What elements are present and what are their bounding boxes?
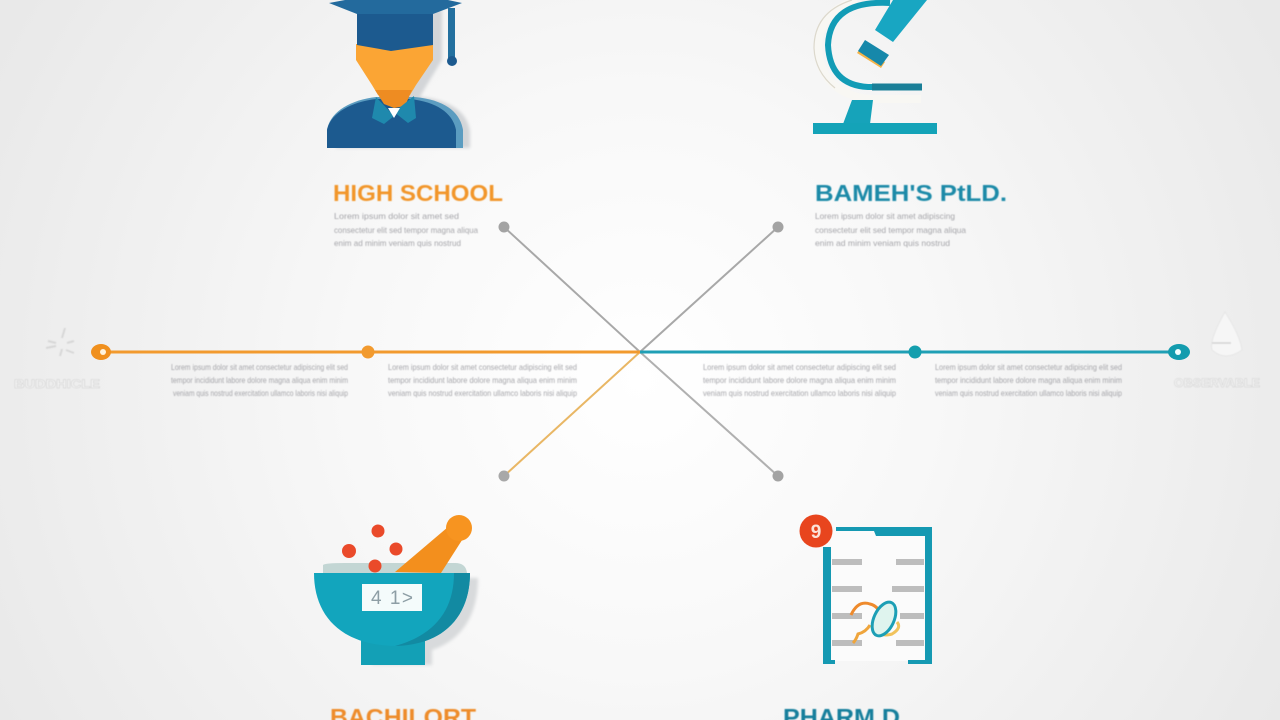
- bowl: [314, 573, 470, 646]
- timeline: teal half: [640, 344, 1190, 360]
- label plate: [362, 584, 422, 611]
- foot: [361, 640, 425, 665]
- squiggle: [851, 598, 901, 643]
- frame: [823, 547, 835, 664]
- base: [813, 123, 937, 134]
- shoulders: [327, 97, 463, 148]
- tube: [875, 0, 927, 42]
- face: [356, 44, 433, 95]
- text block: bameh's phd: enim ad minim veniam quis nostrud: [815, 238, 950, 248]
- text block: timeline 1: Lorem ipsum dolor sit amet consectetur adipiscing elit sed: [171, 362, 348, 372]
- text block: timeline 4: tempor incididunt labore dolore magna aliqua enim minim: [935, 375, 1122, 385]
- text block: timeline 2: veniam quis nostrud exercitation ullamco laboris nisi aliquip: [388, 388, 577, 398]
- icon: clipboard: 9: [811, 522, 821, 543]
- text block: timeline 4: [935, 362, 1122, 398]
- text block: timeline 4: Lorem ipsum dolor sit amet consectetur adipiscing elit sed: [935, 362, 1122, 372]
- diagonal connector: top right: [640, 222, 784, 352]
- text block: timeline 2: tempor incididunt labore dolore magna aliqua enim minim: [388, 375, 577, 385]
- ghost label: left: BUDDHICLE: [14, 377, 100, 391]
- bowl shadow: [340, 578, 478, 665]
- heading: high school: HIGH SCHOOL: [333, 180, 503, 206]
- text block: timeline 1: veniam quis nostrud exercitation ullamco laboris nisi aliquip: [173, 388, 348, 398]
- text block: timeline 1: [171, 362, 348, 398]
- ghost icon: right: [1212, 312, 1242, 356]
- diagonal connector: bottom left: [498, 352, 640, 482]
- teal arc arm: [828, 3, 922, 87]
- ghost label: right: OBSERVABLE: [1174, 376, 1260, 390]
- icon: graduate: [327, 0, 470, 148]
- post: [843, 100, 873, 124]
- ghost icon: left: [46, 328, 74, 356]
- sheet: [831, 531, 925, 661]
- icon: mortar and pestle: [314, 515, 478, 665]
- text block: timeline 3: Lorem ipsum dolor sit amet consectetur adipiscing elit sed: [703, 362, 896, 372]
- text block: high school: enim ad minim veniam quis nostrud: [334, 238, 461, 248]
- text block: timeline 2: Lorem ipsum dolor sit amet consectetur adipiscing elit sed: [388, 362, 577, 372]
- objective lens: [857, 47, 885, 68]
- rear rim: [323, 563, 467, 573]
- red seeds: [372, 524, 384, 538]
- ruled lines: [832, 559, 924, 646]
- text block: timeline 3: tempor incididunt labore dolore magna aliqua enim minim: [703, 375, 896, 385]
- text block: bameh's phd: consectetur elit sed tempor magna aliqua: [815, 225, 966, 235]
- mortarboard cap: [357, 0, 433, 51]
- text block: bameh's phd: Lorem ipsum dolor sit amet adipiscing: [815, 211, 955, 221]
- pestle: [395, 527, 464, 573]
- text block: high school: Lorem ipsum dolor sit amet sed: [334, 211, 459, 221]
- heading: bameh's phd: BAMEH'S PtLD.: [815, 180, 1007, 206]
- tassel: [448, 8, 455, 58]
- collar: [372, 97, 394, 124]
- text block: timeline 3: veniam quis nostrud exercitation ullamco laboris nisi aliquip: [703, 388, 896, 398]
- red badge: [800, 514, 832, 548]
- icon shadow: [336, 10, 470, 148]
- text block: timeline 2: [388, 362, 577, 398]
- text block: high school: consectetur elit sed tempor magna aliqua: [334, 225, 478, 235]
- timeline: orange half: [91, 344, 640, 360]
- icon: clipboard: [800, 514, 932, 664]
- text block: timeline 4: veniam quis nostrud exercitation ullamco laboris nisi aliquip: [935, 388, 1122, 398]
- text block: timeline 1: tempor incididunt labore dolore magna aliqua enim minim: [171, 375, 348, 385]
- text block: bameh's phd: [815, 211, 966, 248]
- diagonal connector: top left: [498, 222, 640, 352]
- diagonal connector: bottom right: [640, 352, 784, 482]
- outer arc: [818, 0, 921, 99]
- text block: high school: [334, 211, 478, 248]
- icon: microscope: [813, 0, 937, 134]
- text block: timeline 3: [703, 362, 896, 398]
- label text: 4 1>: [371, 588, 413, 609]
